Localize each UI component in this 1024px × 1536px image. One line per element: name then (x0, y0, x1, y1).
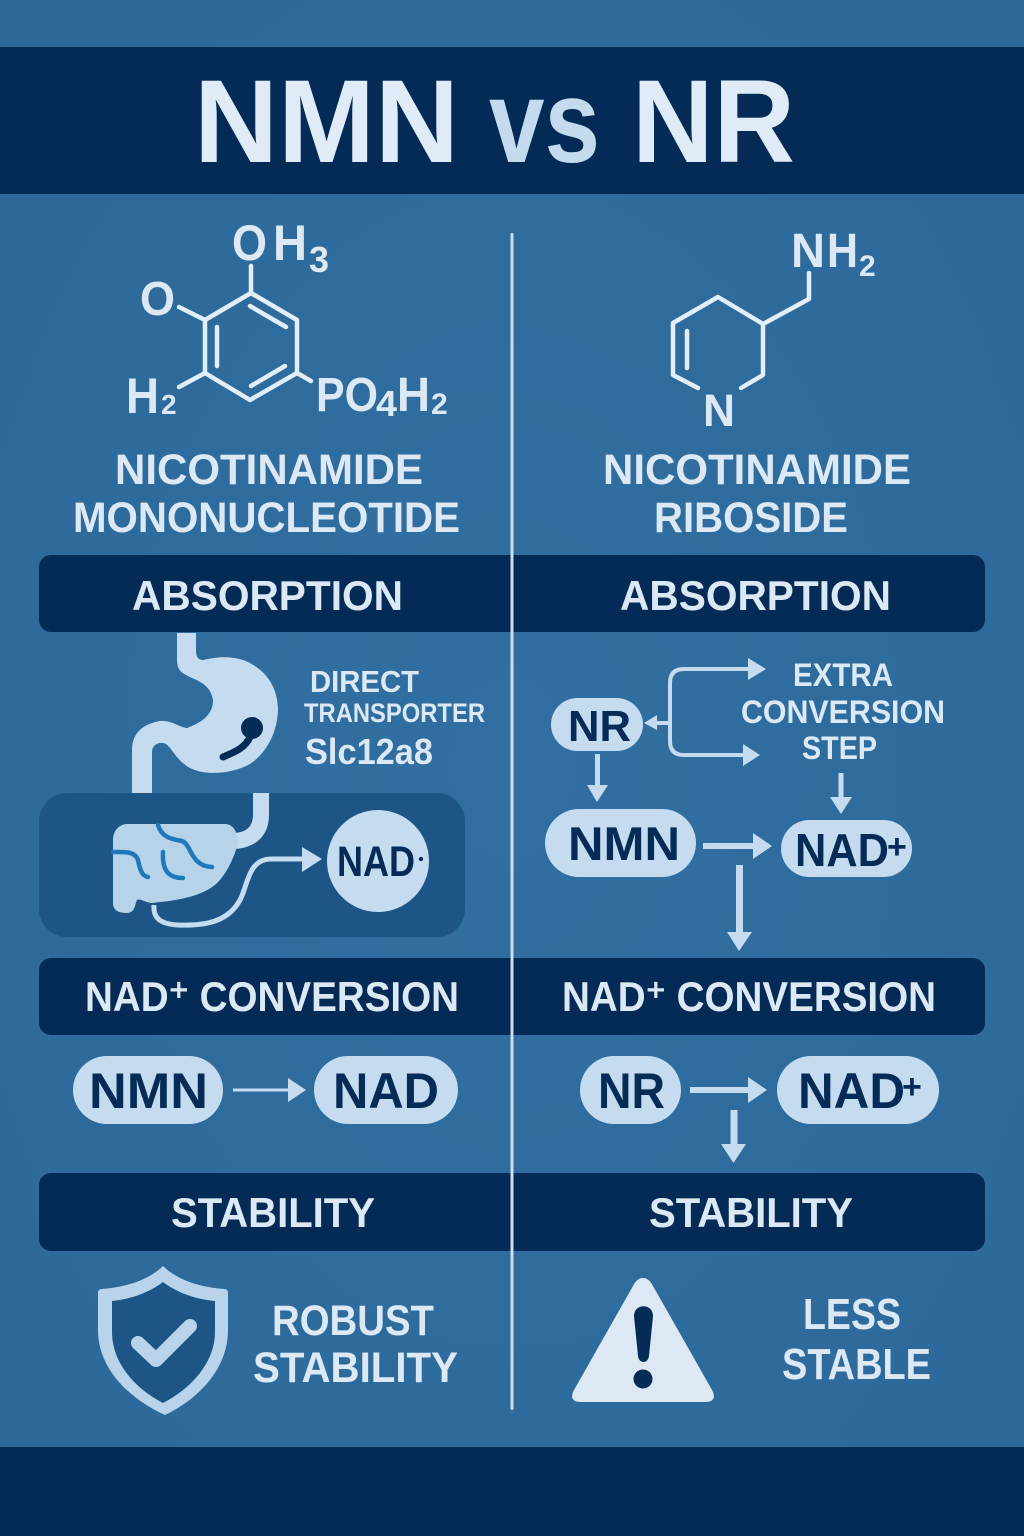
band: NAD+ conversion: NAD⁺ CONVERSION (85, 973, 459, 1020)
heading: Nicotinamide Mononucleotide: MONONUCLEOTIDE (73, 494, 460, 542)
center divider (510, 233, 514, 1410)
band: stability: STABILITY (171, 1189, 375, 1236)
node: NAD+: NAD (795, 824, 889, 876)
molecule: NMN structure: H (273, 215, 307, 271)
title text: NR (632, 56, 795, 188)
arrow: branching (644, 658, 766, 766)
band: stability (39, 1173, 985, 1251)
arrow: step to NAD (830, 773, 852, 814)
band: NAD+ conversion (39, 958, 985, 1035)
text: extra conversion step (741, 657, 945, 766)
molecule: NMN structure: H (397, 369, 430, 422)
flow: NR extra conversion (545, 657, 945, 951)
icon: liver (113, 824, 238, 913)
molecule: NR structure: 2 (859, 250, 876, 283)
text: direct transporter: Slc12a8 (305, 731, 433, 772)
molecule: NMN structure: 3 (309, 239, 329, 280)
heading: Nicotinamide Mononucleotide: NICOTINAMIDE (115, 446, 423, 494)
heading: Nicotinamide Mononucleotide (73, 446, 460, 542)
arrow: liver to NAD (154, 847, 322, 925)
footer band (0, 1447, 1024, 1536)
node: NR (551, 698, 643, 751)
band: absorption: ABSORPTION (132, 572, 403, 619)
arrow: NMN to NAD (703, 833, 772, 859)
node: NAD+ (781, 820, 912, 877)
arrow: NR to NMN (587, 754, 608, 802)
molecule: NR structure: H (827, 225, 858, 278)
text: extra conversion step: EXTRA (793, 657, 893, 693)
flow: NR to NAD+ (580, 1056, 939, 1163)
text: less stable: STABLE (782, 1340, 931, 1389)
molecule: NMN structure: H (126, 368, 159, 424)
flow: NMN to NAD (73, 1056, 458, 1124)
flow: NR to NAD+: NAD (798, 1063, 905, 1119)
text: direct transporter: TRANSPORTER (304, 698, 485, 728)
title banner (0, 47, 1024, 194)
text: robust stability: ROBUST (272, 1297, 434, 1345)
text: direct transporter: DIRECT (310, 664, 419, 699)
heading: Nicotinamide Riboside: RIBOSIDE (654, 494, 848, 542)
node: NMN: NMN (568, 817, 680, 870)
node: NAD+: + (887, 828, 907, 866)
molecule: NR structure: N (703, 385, 735, 436)
text: direct transporter (304, 664, 485, 772)
molecule: NMN structure: 2 (161, 389, 177, 420)
molecule: NMN structure (126, 215, 448, 424)
band: stability: STABILITY (649, 1189, 853, 1236)
molecule: NMN structure: O (140, 273, 175, 326)
text: less stable: LESS (803, 1290, 901, 1339)
icon: stomach (132, 633, 278, 793)
text: robust stability: STABILITY (253, 1344, 458, 1392)
flow: NR to NAD+: NR (598, 1063, 665, 1119)
molecule: NMN structure: 4 (376, 383, 397, 424)
icon: shield with check (98, 1266, 228, 1415)
text: extra conversion step: CONVERSION (741, 694, 945, 730)
panel: liver to NAD (39, 793, 465, 937)
icon: warning triangle (572, 1278, 714, 1402)
molecule: NMN structure: O (232, 215, 267, 271)
text: robust stability (253, 1297, 458, 1392)
node: NR: NR (568, 702, 631, 751)
molecule: NMN structure: 2 (431, 388, 448, 421)
molecule: NR structure (673, 225, 876, 436)
heading: Nicotinamide Riboside: NICOTINAMIDE (603, 446, 911, 494)
text: less stable (782, 1290, 931, 1389)
band: absorption: ABSORPTION (620, 572, 891, 619)
text: extra conversion step: STEP (802, 730, 877, 766)
flow: NMN to NAD: NAD (333, 1063, 439, 1119)
heading: Nicotinamide Riboside (603, 446, 911, 542)
arrow: down to conversion (727, 865, 752, 951)
badge: NAD (327, 810, 429, 912)
icon: intestine pipe (232, 793, 261, 841)
molecule: NR structure: N (791, 225, 825, 278)
band: absorption (39, 555, 985, 632)
flow: NR to NAD+: + (902, 1068, 922, 1106)
node: NMN (545, 809, 696, 877)
badge: NAD: NAD (337, 838, 415, 886)
band: NAD+ conversion: NAD⁺ CONVERSION (562, 973, 936, 1020)
title text: NMN (194, 56, 459, 188)
title text: vs (489, 56, 600, 188)
flow: NMN to NAD: NMN (89, 1063, 208, 1119)
molecule: NMN structure: PO (316, 369, 378, 422)
